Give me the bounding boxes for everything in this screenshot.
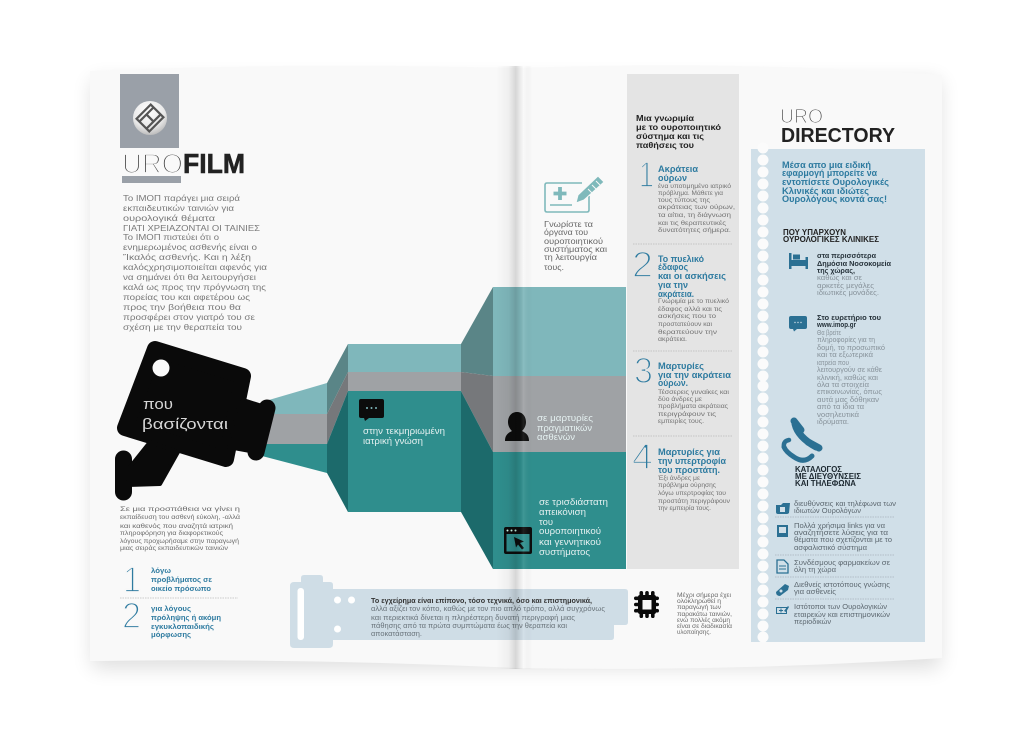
catalog item: societies bbox=[776, 602, 890, 626]
panel: urinary system guide bbox=[627, 74, 739, 569]
catalog item: addresses: ιδιωτών Ουρολόγων bbox=[794, 506, 861, 515]
label: 3d depiction: συστήματος bbox=[539, 547, 590, 558]
index text: ιδρύματα. bbox=[817, 417, 849, 426]
notebook holes bbox=[758, 142, 768, 642]
catalog heading: ΜΕ ΔΙΕΥΘΥΝΣΕΙΣ bbox=[795, 472, 861, 481]
label: medical knowledge: στην τεκμηριωμένη bbox=[363, 426, 445, 437]
panel heading bbox=[636, 113, 721, 150]
label: patient testimonies: σε μαρτυρίες bbox=[537, 413, 593, 424]
hospitals text: ιδιωτικές μονάδες. bbox=[817, 288, 879, 297]
chip note text: ενώ πολλές ακόμη bbox=[677, 617, 731, 624]
belt callout: Το εγχείρημα είναι επίπονο, τόσο τεχνικά, όσο και επιστημονικά, bbox=[371, 596, 592, 605]
item 4: του προστάτη. bbox=[658, 465, 720, 475]
hospitals text: της χώρας, bbox=[817, 266, 855, 275]
small text block: λόγους προχωρήσαμε στην παραγωγή bbox=[120, 537, 239, 545]
directory intro: εντοπίσετε Ουρολογικές bbox=[782, 177, 889, 187]
label: medical knowledge: ιατρική γνώση bbox=[363, 436, 423, 447]
label: 3d depiction: ουροποιητικού bbox=[539, 526, 601, 537]
small text block: Σε μια προσπάθεια να γίνει η bbox=[120, 505, 241, 513]
catalog item: websites: Διεθνείς ιστοτόπους γνώσης bbox=[794, 580, 890, 589]
label: medical knowledge bbox=[363, 426, 445, 447]
clinics heading: ΠΟΥ ΥΠΑΡΧΟΥΝ bbox=[783, 228, 846, 237]
instruments note bbox=[544, 220, 607, 272]
camera label: που bbox=[143, 396, 173, 413]
magazine shadow bbox=[92, 80, 940, 668]
label: patient testimonies: πραγματικών bbox=[537, 423, 592, 434]
icon: telephone bbox=[784, 421, 819, 460]
item 4 bbox=[632, 436, 731, 512]
item 3: ούρων. bbox=[658, 378, 688, 388]
beam from camera bbox=[262, 383, 327, 473]
hospitals text bbox=[817, 251, 892, 297]
item 1: ούρων bbox=[658, 173, 687, 183]
label: 3d depiction: του bbox=[539, 517, 553, 528]
instruments note: Γνωρίστε τα bbox=[544, 220, 593, 229]
small text block: πληροφόρηση για διαφορετικούς bbox=[120, 529, 223, 537]
reason 1: λόγω bbox=[151, 566, 172, 575]
catalog item: pharmacies: Συνδέσμους φαρμακείων σε bbox=[794, 558, 891, 567]
title: urofilm: URO bbox=[122, 148, 183, 179]
left page bbox=[90, 66, 517, 668]
catalog item: links: Πολλά χρήσιμα links για να bbox=[794, 521, 886, 530]
catalog item: links bbox=[777, 521, 892, 552]
item 1: τους τύπους της bbox=[658, 196, 710, 204]
item 3: για την ακράτεια bbox=[658, 370, 732, 380]
chip note text bbox=[677, 592, 732, 636]
index text: αυτά μας δόθηκαν bbox=[817, 395, 879, 404]
directory intro: Μέσα απο μια ειδική bbox=[782, 160, 871, 170]
funnel chart bbox=[262, 287, 626, 569]
belt callout: αποκατάσταση. bbox=[371, 629, 422, 638]
item 2: ακράτεια. bbox=[658, 289, 694, 299]
item 4: λόγω υπερτροφίας του bbox=[658, 489, 726, 497]
instruments note: συστήματος και bbox=[544, 245, 607, 254]
icon: browser window with cursor bbox=[504, 527, 532, 554]
panel heading: Μια γνωριμία bbox=[636, 113, 695, 123]
panel: directory notebook bbox=[751, 142, 925, 642]
item 1: πρόβλημα. Μάθετε για bbox=[658, 189, 723, 197]
chip note text: παραγωγή των bbox=[677, 604, 721, 611]
chip note text: υλοποίησης. bbox=[677, 629, 711, 636]
icon: chat bbox=[789, 316, 807, 332]
film tile icon bbox=[120, 74, 179, 148]
title: urofilm bbox=[122, 148, 245, 179]
panel heading: με το ουροποιητικό bbox=[636, 122, 721, 132]
chip note text: παρακάτω ταινιών, bbox=[677, 611, 732, 618]
small text block: και καθενός που αναζητά ιατρική bbox=[120, 522, 233, 530]
catalog item: links: ασφαλιστικό σύστημα bbox=[794, 543, 868, 552]
clinics heading bbox=[783, 228, 879, 244]
item 4: Έξι άνδρες με bbox=[657, 474, 700, 482]
label: 3d depiction: σε τρισδιάστατη bbox=[539, 497, 608, 508]
label: patient testimonies: ασθενών bbox=[537, 432, 575, 443]
instruments note: ουροποιητικού bbox=[544, 237, 603, 246]
item 2: για την bbox=[658, 280, 688, 290]
first facet bbox=[327, 344, 348, 512]
icon: speech bubble bbox=[359, 399, 384, 421]
catalog item: websites: για ασθενείς bbox=[794, 587, 836, 596]
item 1: ένα υποτιμημένο ιατρικό bbox=[658, 182, 731, 190]
index text: επικοινωνίας, όπως bbox=[817, 387, 883, 396]
item 1: ακράτειας των ούρων, bbox=[658, 203, 735, 211]
icon: person bbox=[505, 412, 529, 441]
item 4: Μαρτυρίες για bbox=[658, 447, 721, 457]
catalog item: addresses: διευθύνσεις και τηλέφωνα των bbox=[794, 499, 896, 508]
catalog heading bbox=[795, 465, 861, 488]
instruments note: τη λειτουργία bbox=[544, 253, 597, 262]
index text bbox=[816, 313, 885, 426]
instruments note: όργανα του bbox=[544, 228, 588, 237]
catalog item: societies: περιοδικών bbox=[794, 617, 831, 626]
chip note text: είναι σε διαδικασία bbox=[677, 623, 732, 630]
item 1: 1 bbox=[639, 154, 654, 195]
index text: www.imop.gr bbox=[816, 320, 856, 329]
clinics heading: ΟΥΡΟΛΟΓΙΚΕΣ ΚΛΙΝΙΚΕΣ bbox=[783, 235, 879, 244]
title: urofilm: FILM bbox=[183, 148, 245, 179]
directory intro: Ουρολόγους κοντά σας! bbox=[782, 194, 887, 204]
item 2 bbox=[632, 244, 729, 343]
reason 2 bbox=[122, 595, 221, 639]
small text block bbox=[120, 505, 241, 552]
panel heading: παθήσεις του bbox=[636, 140, 694, 150]
catalog item: links: θέματα που σχετίζονται με το bbox=[794, 535, 892, 544]
intro text block: ΓΙΑΤΙ ΧΡΕΙΑΖΟΝΤΑΙ ΟΙ ΤΑΙΝΙΕΣ bbox=[123, 223, 260, 233]
intro text block: σχέση με την θεραπεία του bbox=[123, 322, 243, 332]
intro text block: ουρολογικά θέματα bbox=[123, 213, 215, 223]
reason 2: πρόληψης ή ακόμη bbox=[151, 613, 221, 622]
catalog item: societies: εταιρειών και επιστημονικών bbox=[794, 610, 890, 619]
intro text block: Το ΙΜΟΠ παράγει μια σειρά bbox=[123, 193, 240, 203]
index text: νοσηλευτικά bbox=[817, 410, 859, 419]
catalog item: websites bbox=[776, 580, 890, 596]
intro text block: εκπαιδευτικών ταινιών για bbox=[123, 203, 234, 213]
icon: form and pencil bbox=[545, 176, 604, 212]
belt callout bbox=[290, 575, 628, 648]
reason 1: 1 bbox=[123, 559, 141, 600]
item 4: την υπερτροφία bbox=[658, 456, 727, 466]
intro text block: Ἴκαλός ασθενής. Και η λέξη bbox=[123, 252, 251, 262]
directory intro: Κλινικές και ιδιώτες bbox=[782, 186, 869, 196]
item 3: Τέσσερεις γυναίκες και bbox=[658, 388, 730, 396]
chip note text: Μέχρι σήμερα έχει bbox=[677, 592, 732, 599]
item 4: πρόβλημα ούρησης bbox=[658, 481, 716, 489]
item 3 bbox=[634, 350, 732, 425]
catalog heading: ΚΑΤΑΛΟΓΟΣ bbox=[795, 465, 842, 474]
label: patient testimonies bbox=[537, 413, 593, 443]
item 2: ασκήσεις που το bbox=[658, 313, 716, 320]
belt callout: πάθησης από τα πρώτα συμπτώματα έως την θεραπεία και bbox=[371, 621, 567, 630]
reason 2: για λόγους bbox=[151, 604, 191, 613]
middle block bbox=[348, 344, 461, 512]
catalog item: societies: Ιστότοποι των Ουρολογικών bbox=[794, 602, 887, 611]
directory intro: εφαρμογή μπορείτε να bbox=[782, 168, 878, 178]
item 2: θεραπεύουν την bbox=[658, 328, 718, 336]
belt callout: και περιεκτικά δίνεται η πληρέστερη δυνατή περιγραφή μιας bbox=[371, 613, 575, 622]
small text block: μιας σειράς εκπαιδευτικών ταινιών bbox=[120, 544, 228, 552]
item 2: Γνωριμία με το πυελικό bbox=[658, 297, 729, 305]
item 2: προστατεύουν και bbox=[658, 320, 713, 328]
item 4: την εμπειρία τους. bbox=[658, 504, 711, 512]
index text: κλινική, καθώς και bbox=[817, 373, 878, 382]
icon: chip bbox=[634, 591, 659, 618]
icon: security camera bbox=[124, 349, 267, 492]
book gutter shading bbox=[496, 66, 532, 669]
instruments note: τους. bbox=[544, 263, 564, 272]
reason 1: προβλήματος σε bbox=[151, 575, 212, 584]
index text: Θα βρείτε bbox=[817, 328, 842, 337]
title: uro directory: DIRECTORY bbox=[781, 125, 896, 147]
hospitals text: αρκετές μεγάλες bbox=[817, 281, 875, 290]
final block bbox=[493, 287, 626, 569]
catalog item: pharmacies bbox=[777, 558, 891, 574]
item 2: έδαφος αλλά και τις bbox=[658, 305, 722, 313]
panel heading: σύστημα και τις bbox=[636, 131, 705, 141]
intro text block: καλόςχρησιμοποιείται αφενός για bbox=[123, 262, 267, 272]
item 3: δύο άνδρες με bbox=[658, 395, 702, 403]
belt callout: αλλά αξίζει τον κόπο, καθώς με τον πιο απλό τρόπο, αλλά συγχρόνως bbox=[371, 604, 605, 613]
catalog heading: ΚΑΙ ΤΗΛΕΦΩΝΑ bbox=[795, 479, 856, 488]
item 2: Το πυελικό bbox=[658, 254, 705, 264]
item 1: τα αίτια, τη διάγνωση bbox=[658, 211, 731, 219]
index text: δομή, το προσωπικό bbox=[817, 343, 885, 352]
title: uro directory bbox=[780, 106, 896, 147]
index text: λειτουργούν σε κάθε bbox=[817, 365, 883, 374]
catalog item: addresses bbox=[776, 499, 896, 515]
label: 3d depiction: απεικόνιση bbox=[539, 507, 586, 518]
index text: ιατρεία που bbox=[817, 358, 849, 367]
intro text block: προσφέρει στον γιατρό του σε bbox=[123, 312, 255, 322]
index text: Στο ευρετήριο του bbox=[817, 313, 881, 322]
title underline bar bbox=[122, 176, 181, 183]
item 1: Ακράτεια bbox=[658, 164, 699, 174]
reason 2: εγκυκλοπαιδικής bbox=[151, 622, 214, 631]
small text block: εκπαίδευση του ασθενή εύκολη, -αλλά bbox=[120, 513, 240, 521]
hospitals text: καθώς και σε bbox=[817, 273, 863, 282]
catalog item: pharmacies: όλη τη χώρα bbox=[794, 565, 837, 574]
second facet bbox=[461, 287, 493, 569]
intro text block: καλά ως προς την πρόγνωση της bbox=[123, 282, 266, 292]
reason 2: μόρφωσης bbox=[151, 630, 191, 639]
chip note text: ολοκληρωθεί η bbox=[677, 598, 722, 605]
item 1 bbox=[639, 154, 735, 234]
intro text block bbox=[123, 193, 267, 332]
directory intro bbox=[782, 160, 889, 204]
reason 1 bbox=[123, 559, 212, 600]
item 2: 2 bbox=[632, 244, 653, 285]
item 3: περιγράφουν τις bbox=[658, 410, 716, 418]
index text: και τα εξωτερικά bbox=[817, 350, 873, 359]
item 2: ακράτεια. bbox=[658, 335, 687, 343]
hospitals text: στα περισσότερα bbox=[817, 251, 877, 260]
item 4: 4 bbox=[632, 436, 653, 477]
intro text block: Το ΙΜΟΠ πιστεύει ότι ο bbox=[123, 232, 219, 242]
item 1: δυνατότητες σήμερα. bbox=[658, 226, 731, 234]
item 2: έδαφος bbox=[658, 262, 688, 272]
item 3: προβλήματα ακράτειας bbox=[658, 402, 728, 410]
index text: πληροφορίες για τη bbox=[817, 335, 875, 344]
item 4: προστάτη περιγράφουν bbox=[658, 497, 731, 505]
item 2: και οι ασκήσεις bbox=[658, 271, 726, 281]
label: 3d depiction bbox=[539, 497, 608, 558]
item 1: και τις θεραπευτικές bbox=[658, 219, 726, 227]
intro text block: να σημάνει ότι θα λειτουργήσει bbox=[123, 272, 256, 282]
label: 3d depiction: και γεννητικού bbox=[539, 537, 601, 548]
camera label bbox=[142, 396, 228, 433]
reason 2: 2 bbox=[122, 595, 141, 636]
intro text block: πορείας του και αφετέρου ως bbox=[123, 292, 250, 302]
reason 1: οικείο πρόσωπο bbox=[151, 584, 211, 593]
icon: bed bbox=[789, 253, 808, 269]
right page bbox=[517, 65, 942, 669]
camera label: βασίζονται bbox=[142, 416, 228, 433]
intro text block: προς την βοήθεια που θα bbox=[123, 302, 241, 312]
item 3: Μαρτυρίες bbox=[658, 361, 704, 371]
index text: όλα τα στοιχεία bbox=[817, 380, 869, 389]
hospitals text: Δημόσια Νοσοκομεία bbox=[817, 259, 892, 268]
intro text block: ενημερωμένος ασθενής είναι ο bbox=[123, 242, 257, 252]
item 3: εμπειρίες τους. bbox=[658, 417, 704, 425]
title: uro directory: URO bbox=[780, 106, 823, 128]
catalog item: links: αναζητήσετε λύσεις για τα bbox=[794, 528, 889, 537]
item 3: 3 bbox=[634, 350, 653, 391]
index text: από τα ίδια τα bbox=[817, 402, 864, 411]
